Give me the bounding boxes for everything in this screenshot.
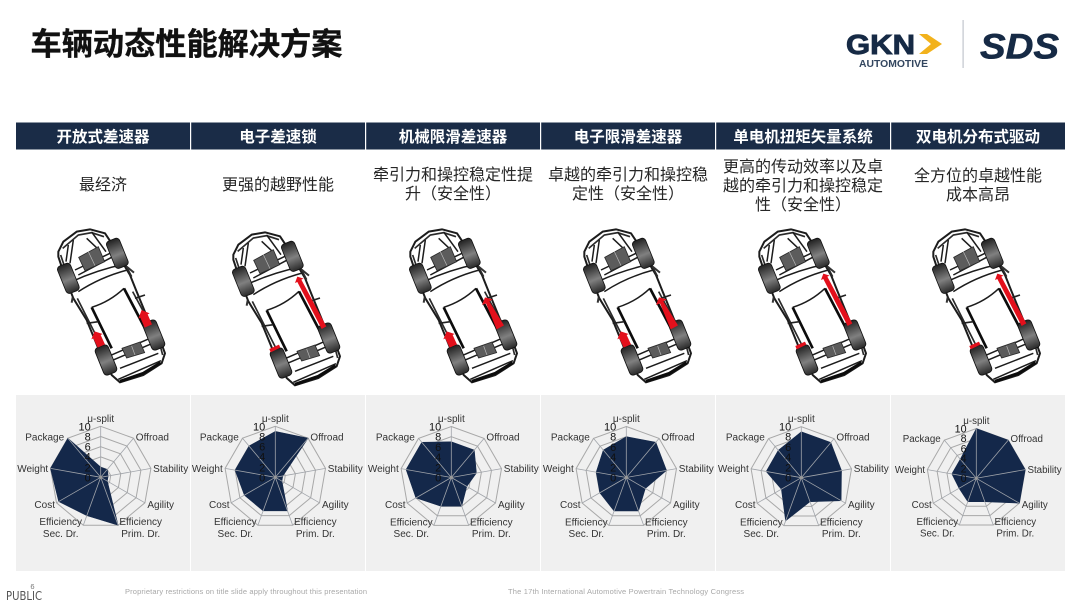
radar chart: electronic LSD bbox=[543, 414, 714, 540]
logo: SDS: SDS bbox=[980, 28, 1059, 66]
radar chart: e-locker: μ-split bbox=[262, 414, 289, 425]
car diagram: single-motor torque vectoring bbox=[757, 229, 867, 382]
radar chart: dual-motor distributed drive: 10 bbox=[955, 423, 967, 435]
radar chart: dual-motor distributed drive: μ-split bbox=[963, 416, 990, 427]
radar chart: single-motor torque vectoring: 4 bbox=[785, 452, 791, 464]
radar chart: open differential: Package bbox=[25, 432, 65, 443]
radar chart: e-locker: Agility bbox=[322, 500, 349, 511]
radar chart: open differential: 8 bbox=[85, 431, 91, 443]
description: single-motor torque vectoring: 越的牵引力和操控稳定 bbox=[723, 177, 883, 195]
description: dual-motor distributed drive bbox=[914, 167, 1042, 204]
description: mechanical LSD: 牵引力和操控稳定性提 bbox=[373, 166, 533, 184]
radar chart: e-locker: Cost bbox=[209, 500, 230, 511]
radar chart: single-motor torque vectoring: 8 bbox=[785, 432, 791, 444]
description: mechanical LSD: 升（安全性） bbox=[405, 185, 501, 203]
radar chart: e-locker bbox=[192, 414, 363, 540]
header bar bbox=[16, 122, 1065, 150]
radar chart: open differential: Prim. Dr. bbox=[121, 529, 160, 540]
radar chart: mechanical LSD: Package bbox=[376, 432, 415, 444]
radar chart: mechanical LSD: 10 bbox=[429, 422, 441, 434]
radar chart: e-locker: Weight bbox=[192, 464, 223, 475]
radar chart: single-motor torque vectoring: Cost bbox=[735, 500, 756, 511]
radar chart: single-motor torque vectoring: Sec. Dr. bbox=[744, 529, 779, 540]
radar chart: mechanical LSD: Sec. Dr. bbox=[394, 529, 429, 540]
radar chart: dual-motor distributed drive: Cost bbox=[912, 500, 932, 511]
radar chart: e-locker: Offroad bbox=[310, 432, 344, 443]
radar chart: electronic LSD: Offroad bbox=[661, 432, 695, 444]
radar chart: dual-motor distributed drive: Agility bbox=[1022, 500, 1048, 511]
radar chart: single-motor torque vectoring: Offroad bbox=[836, 433, 870, 444]
description: mechanical LSD bbox=[373, 166, 533, 203]
radar chart: single-motor torque vectoring: Efficiency bbox=[740, 518, 783, 529]
radar chart: open differential: Offroad bbox=[136, 432, 169, 443]
radar chart: e-locker: 0 bbox=[259, 472, 265, 484]
radar chart: open differential: μ-split bbox=[87, 414, 114, 425]
radar chart: e-locker: Package bbox=[200, 432, 239, 443]
header bar: 电子差速锁 bbox=[239, 127, 317, 146]
description: electronic LSD: 卓越的牵引力和操控稳 bbox=[548, 166, 708, 184]
radar chart: dual-motor distributed drive: Package bbox=[903, 434, 941, 445]
description: single-motor torque vectoring: 更高的传动效率以及卓 bbox=[723, 158, 883, 176]
radar chart: dual-motor distributed drive: Weight bbox=[895, 465, 925, 476]
radar chart: e-locker: Efficiency bbox=[294, 517, 337, 528]
description: electronic LSD bbox=[548, 166, 708, 203]
footer: proprietary note: Proprietary restrictions on title slide apply throughout this presentation bbox=[125, 587, 367, 596]
radar chart: electronic LSD: Weight bbox=[543, 464, 574, 475]
header bar: 电子限滑差速器 bbox=[574, 128, 683, 146]
radar chart: dual-motor distributed drive: 8 bbox=[961, 433, 967, 445]
radar chart: dual-motor distributed drive: Stability bbox=[1027, 465, 1062, 476]
description: single-motor torque vectoring: 性（安全性） bbox=[755, 196, 851, 214]
radar chart: open differential: 10 bbox=[78, 421, 91, 433]
title: 车辆动态性能解决方案 bbox=[30, 27, 342, 62]
radar chart: mechanical LSD: 4 bbox=[435, 452, 441, 464]
radar chart: e-locker: 6 bbox=[259, 442, 265, 454]
radar chart: electronic LSD: Efficiency bbox=[645, 517, 688, 528]
header bar: 双电机分布式驱动 bbox=[916, 127, 1040, 146]
radar chart: open differential: Sec. Dr. bbox=[43, 529, 78, 540]
radar chart: mechanical LSD: Agility bbox=[498, 500, 525, 511]
description: dual-motor distributed drive: 成本高昂 bbox=[946, 186, 1010, 204]
radar chart: electronic LSD: Efficiency bbox=[565, 517, 608, 528]
radar chart: dual-motor distributed drive: 4 bbox=[961, 453, 967, 465]
logo: GKN Automotive: GKN bbox=[846, 29, 915, 60]
header bar: 单电机扭矩矢量系统 bbox=[733, 127, 873, 146]
radar chart: open differential: Stability bbox=[153, 464, 188, 475]
description: open differential: 最经济 bbox=[79, 176, 127, 194]
radar chart: open differential: Cost bbox=[34, 500, 55, 511]
radar chart: mechanical LSD: 0 bbox=[435, 472, 441, 484]
description: single-motor torque vectoring bbox=[723, 158, 883, 214]
radar chart: electronic LSD: 0 bbox=[610, 472, 616, 484]
radar chart: electronic LSD: Agility bbox=[673, 500, 700, 511]
radar chart: dual-motor distributed drive: Prim. Dr. bbox=[996, 528, 1034, 539]
radar chart: dual-motor distributed drive bbox=[895, 416, 1062, 539]
classification label: PUBLIC bbox=[6, 589, 42, 603]
radar chart: electronic LSD: μ-split bbox=[613, 414, 640, 425]
radar chart: mechanical LSD: 6 bbox=[435, 442, 441, 454]
description: dual-motor distributed drive: 全方位的卓越性能 bbox=[914, 167, 1042, 185]
radar chart: open differential: 0 bbox=[85, 472, 91, 484]
description: electronic LSD: 定性（安全性） bbox=[572, 185, 684, 203]
radar chart: electronic LSD: Cost bbox=[560, 500, 581, 511]
radar chart: e-locker: 4 bbox=[259, 452, 265, 464]
radar chart: electronic LSD: Stability bbox=[679, 464, 714, 475]
radar chart: mechanical LSD: Efficiency bbox=[470, 517, 513, 528]
radar chart: dual-motor distributed drive: 2 bbox=[961, 463, 967, 475]
radar chart: open differential: Weight bbox=[17, 464, 48, 475]
car diagram: mechanical LSD bbox=[408, 229, 518, 382]
radar chart: open differential: 4 bbox=[85, 452, 91, 464]
radar chart: single-motor torque vectoring: Efficiency bbox=[820, 518, 863, 529]
radar chart: single-motor torque vectoring: μ-split bbox=[788, 414, 815, 425]
radar chart: e-locker: 10 bbox=[253, 421, 265, 433]
radar chart: mechanical LSD: 2 bbox=[435, 462, 441, 474]
radar chart: single-motor torque vectoring bbox=[718, 414, 889, 540]
car diagram: e-locker bbox=[231, 232, 341, 385]
header bar: 机械限滑差速器 bbox=[399, 128, 508, 146]
panel: radar chart backgrounds bbox=[16, 395, 1065, 571]
radar chart: mechanical LSD: Weight bbox=[368, 464, 399, 475]
header bar: 开放式差速器 bbox=[56, 128, 150, 146]
radar chart: dual-motor distributed drive: 6 bbox=[961, 443, 967, 455]
logo: GKN Automotive: AUTOMOTIVE bbox=[859, 58, 928, 70]
logo: GKN Automotive bbox=[846, 29, 942, 70]
radar chart: single-motor torque vectoring: 0 bbox=[785, 473, 791, 485]
radar chart: electronic LSD: Sec. Dr. bbox=[569, 529, 604, 540]
radar chart: e-locker: Prim. Dr. bbox=[296, 529, 335, 540]
radar chart: single-motor torque vectoring: 2 bbox=[785, 463, 791, 475]
radar chart: electronic LSD: 4 bbox=[610, 452, 616, 464]
radar chart: electronic LSD: 2 bbox=[610, 462, 616, 474]
footer: congress name: The 17th International Automotive Powertrain Technology Congress bbox=[508, 587, 744, 596]
page number: 6 bbox=[30, 582, 35, 591]
radar chart: single-motor torque vectoring: Stability bbox=[854, 464, 889, 475]
radar chart: electronic LSD: 6 bbox=[610, 442, 616, 454]
radar chart: single-motor torque vectoring: Prim. Dr. bbox=[822, 529, 861, 540]
radar chart: dual-motor distributed drive: Efficiency bbox=[917, 517, 958, 528]
radar chart: electronic LSD: 8 bbox=[610, 432, 616, 444]
radar chart: single-motor torque vectoring: Package bbox=[726, 433, 765, 444]
radar chart: electronic LSD: Prim. Dr. bbox=[647, 529, 686, 540]
radar chart: open differential: Agility bbox=[147, 500, 174, 511]
radar chart: mechanical LSD: μ-split bbox=[438, 414, 465, 425]
radar chart: dual-motor distributed drive: 0 bbox=[961, 473, 967, 485]
radar chart: e-locker: Sec. Dr. bbox=[218, 529, 253, 540]
radar chart: dual-motor distributed drive: Efficiency bbox=[995, 517, 1036, 528]
radar chart: open differential: 2 bbox=[85, 462, 91, 474]
radar chart: mechanical LSD: Stability bbox=[504, 464, 539, 475]
radar chart: single-motor torque vectoring: Weight bbox=[718, 464, 749, 475]
description: e-locker: 更强的越野性能 bbox=[222, 176, 334, 194]
radar chart: open differential: 6 bbox=[85, 442, 91, 454]
car diagram: dual-motor distributed drive bbox=[931, 229, 1041, 382]
radar chart: open differential: Efficiency bbox=[119, 517, 162, 528]
radar chart: mechanical LSD: Prim. Dr. bbox=[472, 529, 511, 540]
radar chart: single-motor torque vectoring: 6 bbox=[785, 442, 791, 454]
radar chart: open differential: Efficiency bbox=[39, 517, 82, 528]
radar chart: mechanical LSD bbox=[368, 414, 539, 540]
radar chart: dual-motor distributed drive: Sec. Dr. bbox=[920, 528, 955, 539]
radar chart: electronic LSD: Package bbox=[551, 432, 590, 444]
radar chart: mechanical LSD: Cost bbox=[385, 500, 406, 511]
radar chart: single-motor torque vectoring: Agility bbox=[848, 500, 875, 511]
radar chart: mechanical LSD: 8 bbox=[435, 432, 441, 444]
radar chart: e-locker: Stability bbox=[328, 464, 363, 475]
radar chart: dual-motor distributed drive: Offroad bbox=[1011, 434, 1043, 445]
radar chart: electronic LSD: 10 bbox=[604, 422, 616, 434]
radar chart: mechanical LSD: Efficiency bbox=[390, 517, 433, 528]
radar chart: single-motor torque vectoring: 10 bbox=[779, 422, 791, 434]
radar chart: open differential bbox=[17, 414, 188, 540]
car diagram: open differential bbox=[56, 229, 166, 382]
radar chart: mechanical LSD: Offroad bbox=[486, 432, 520, 444]
car diagram: electronic LSD bbox=[582, 229, 692, 382]
radar chart: e-locker: 8 bbox=[259, 431, 265, 443]
radar chart: e-locker: Efficiency bbox=[214, 517, 257, 528]
radar chart: e-locker: 2 bbox=[259, 462, 265, 474]
